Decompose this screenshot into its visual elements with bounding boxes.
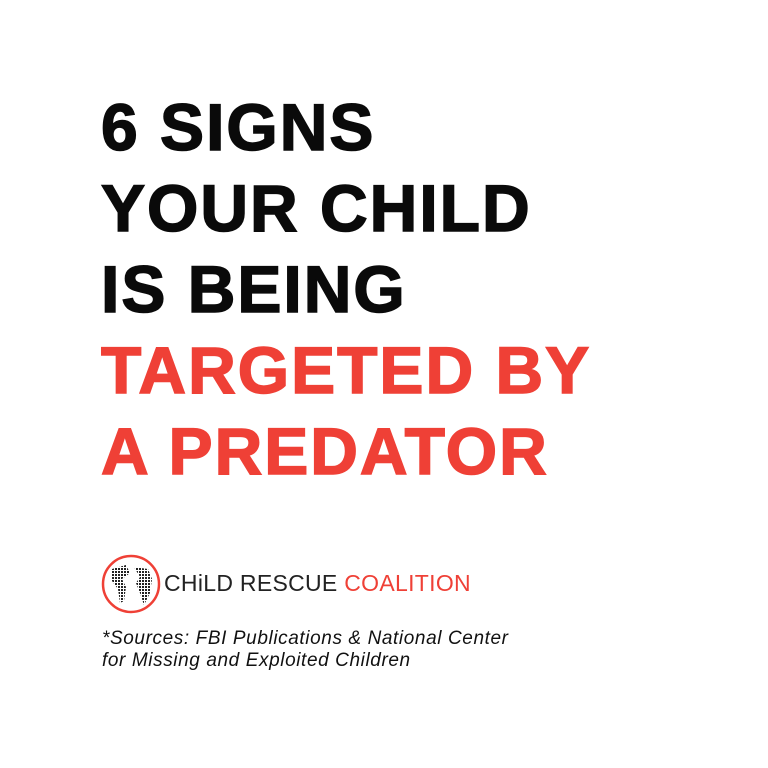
title [100,90,591,488]
title: IS BEING [101,252,407,326]
title: YOUR CHILD [101,171,532,245]
sources text: *Sources: FBI Publications & National Center [102,628,509,649]
title: 6 SIGNS [101,90,375,164]
title: TARGETED BY [101,333,591,407]
sources text [102,628,509,671]
icon: globe [102,554,160,614]
title: A PREDATOR [101,414,549,488]
logo text: CHiLD RESCUE COALITION [164,570,471,596]
logo [102,554,471,614]
sources text: for Missing and Exploited Children [102,650,411,671]
